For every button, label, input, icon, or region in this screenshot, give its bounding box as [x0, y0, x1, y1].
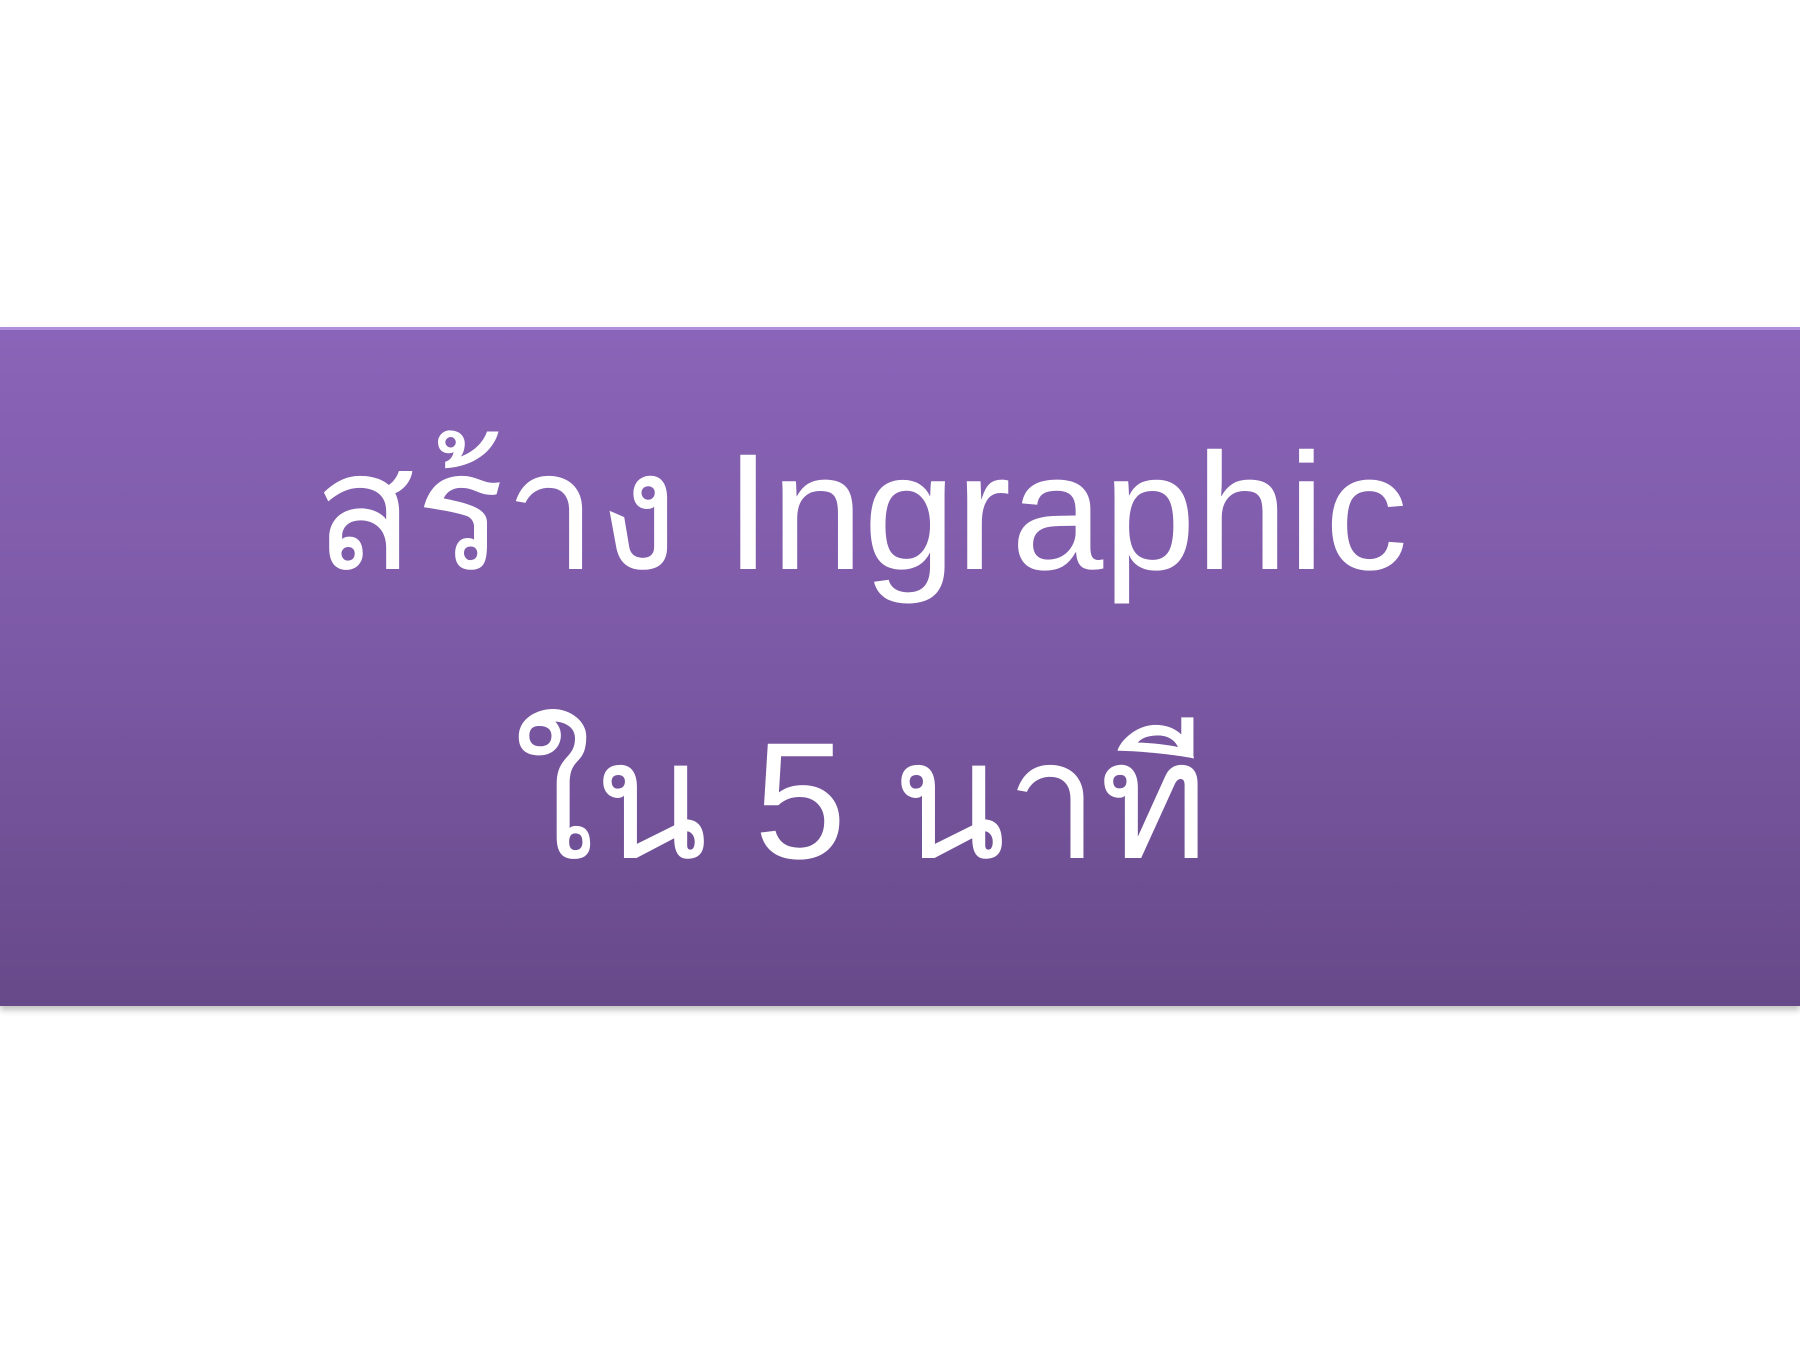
panel: purple title band [0, 327, 1800, 1006]
title line 1: สร้าง Ingraphic [314, 420, 1408, 605]
title line 2: ใน 5 นาที [513, 709, 1209, 894]
